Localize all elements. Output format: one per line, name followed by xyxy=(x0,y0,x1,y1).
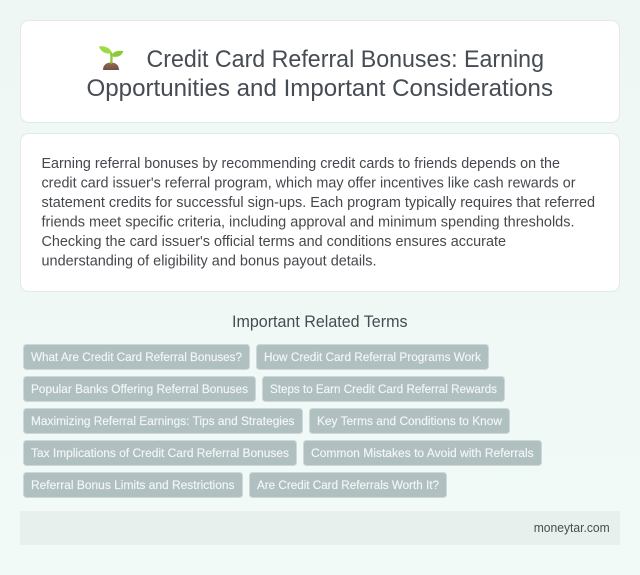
tag: key terms xyxy=(310,408,510,434)
tag: popular banks xyxy=(24,376,256,402)
description text: Earning referral bonuses by recommending credit cards to friends depends on the xyxy=(42,156,560,172)
tag: common mistakes xyxy=(304,440,542,466)
tag: limits and restrictions xyxy=(24,472,242,498)
tag group: related terms xyxy=(24,344,542,498)
panel: title card xyxy=(20,20,620,122)
tag: popular banks: Popular Banks Offering Referral Bonuses xyxy=(31,382,248,396)
description text: Checking the card issuer's official terms and conditions ensures accurate xyxy=(42,234,506,250)
heading: important related terms: Important Related Terms xyxy=(232,313,408,331)
tag: steps to earn xyxy=(262,376,504,402)
description text: statement credits for successful sign-ups. Each program typically requires that referred xyxy=(42,195,595,211)
footer: source: moneytar.com xyxy=(534,520,610,535)
tag: limits and restrictions: Referral Bonus Limits and Restrictions xyxy=(31,478,234,492)
footer bar xyxy=(20,511,620,545)
tag: key terms: Key Terms and Conditions to Know xyxy=(317,414,502,428)
title text: Opportunities and Important Considerations xyxy=(86,75,553,102)
description text xyxy=(42,156,595,270)
tag: how programs work: How Credit Card Referral Programs Work xyxy=(264,350,482,364)
tag: worth it: Are Credit Card Referrals Worth It? xyxy=(257,478,439,492)
tag: tax implications: Tax Implications of Credit Card Referral Bonuses xyxy=(31,446,289,460)
tag: maximizing earnings xyxy=(24,408,302,434)
tag: steps to earn: Steps to Earn Credit Card Referral Rewards xyxy=(270,382,497,396)
icon: seedling xyxy=(99,46,123,70)
panel: description card xyxy=(20,134,620,292)
description text: credit card issuer's referral program, which may offer incentives like cash rewards or xyxy=(42,176,576,192)
tag: maximizing earnings: Maximizing Referral Earnings: Tips and Strategies xyxy=(31,414,294,428)
tag: how programs work xyxy=(256,344,488,370)
tag: common mistakes: Common Mistakes to Avoid with Referrals xyxy=(311,446,534,460)
title text xyxy=(86,46,553,102)
description text: friends meet specific criteria, including approval and minimum spending thresholds. xyxy=(42,214,574,230)
tag: tax implications xyxy=(24,440,296,466)
tag: what are bonuses xyxy=(24,344,250,370)
tag: worth it xyxy=(250,472,446,498)
description text: understanding of eligibility and bonus payout details. xyxy=(42,254,376,270)
tag: what are bonuses: What Are Credit Card Referral Bonuses? xyxy=(31,350,242,364)
title text: Credit Card Referral Bonuses: Earning xyxy=(146,46,544,73)
